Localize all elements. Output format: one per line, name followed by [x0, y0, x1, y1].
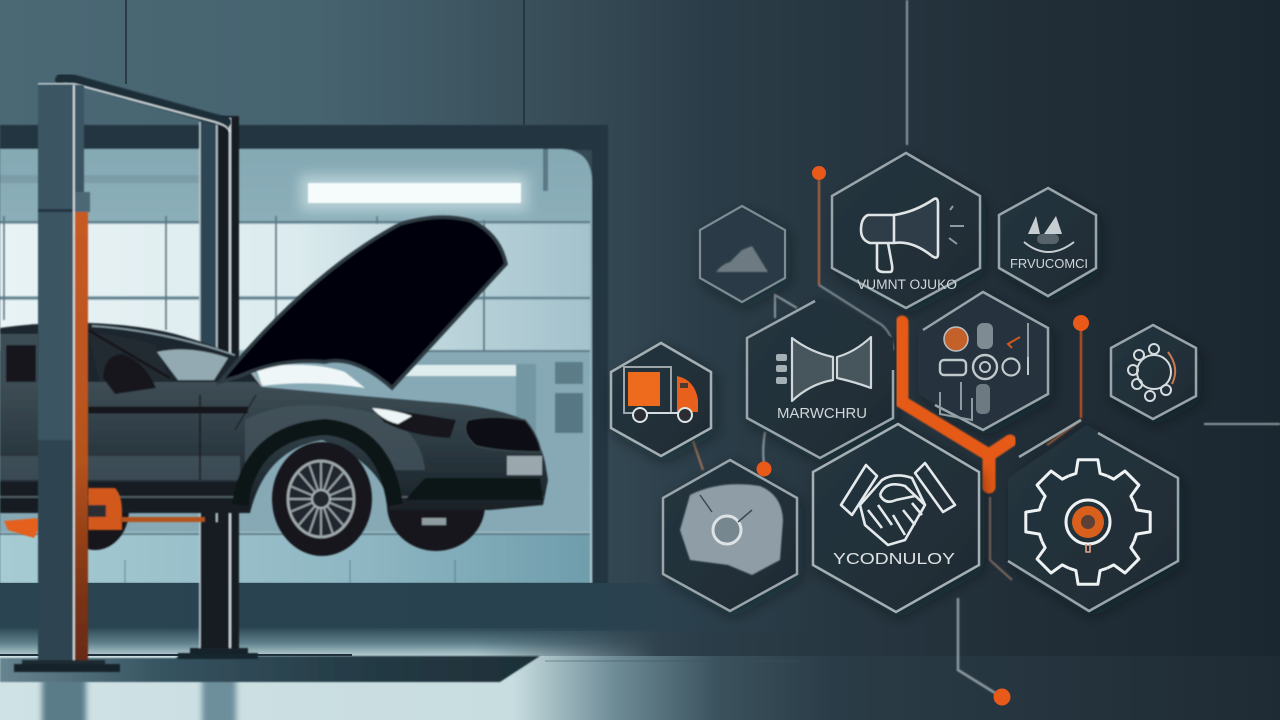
car	[0, 217, 548, 556]
rear wheel	[61, 470, 129, 550]
grille	[465, 417, 541, 452]
ceiling cables	[126, 0, 524, 125]
engine bay light	[256, 365, 365, 388]
open hood	[220, 217, 506, 388]
icon: bow-tie	[792, 337, 871, 401]
hexagon: handshake	[813, 424, 979, 612]
hexagon: gear	[1008, 420, 1178, 611]
hexagon: tools	[918, 292, 1048, 430]
icon: face	[1024, 216, 1074, 252]
icon: brake disc	[680, 484, 783, 575]
door crease and lines	[88, 406, 248, 414]
fender arch	[240, 427, 395, 505]
ceiling light bar	[300, 175, 528, 211]
label: VUMNT OJUKO	[857, 277, 957, 292]
floor	[0, 583, 813, 720]
glass panes	[0, 224, 590, 583]
hexagon: truck	[611, 343, 711, 456]
hexagon: small gear	[1111, 325, 1196, 419]
hook	[543, 149, 548, 191]
icon: gear	[1026, 460, 1150, 584]
sill	[0, 482, 250, 513]
icon: mountain	[716, 246, 768, 272]
icon: handshake	[841, 463, 955, 545]
hexagon: megaphone	[832, 153, 980, 308]
back wall equipment	[516, 362, 583, 454]
front wheel	[272, 442, 372, 556]
rear light bar	[396, 365, 516, 376]
lift: front post	[14, 85, 120, 672]
hexagon: face	[999, 188, 1096, 296]
hexagon: marketing	[747, 298, 893, 458]
icon: scalloped ring	[1128, 344, 1175, 401]
icon: truck	[624, 367, 698, 422]
icon: tools cluster	[940, 323, 1028, 420]
body panel highlight	[0, 456, 240, 480]
orange dots	[756, 166, 1089, 706]
hexagon: disc	[663, 460, 797, 611]
car body	[0, 382, 548, 513]
thin connector lines	[693, 0, 1280, 696]
window frame	[0, 125, 608, 590]
label: FRVUCOMCI	[1010, 256, 1088, 271]
fender highlight	[245, 405, 425, 470]
label: YCODNULOY	[833, 551, 955, 568]
orange lift arm	[4, 488, 205, 538]
number plate	[507, 456, 542, 475]
headlight	[372, 408, 456, 438]
label: MARWCHRU	[777, 405, 867, 422]
far front wheel	[387, 459, 485, 551]
orange connector	[902, 322, 1010, 487]
lower bumper	[405, 478, 543, 500]
icon: megaphone	[861, 199, 964, 272]
lift: rear post	[178, 116, 258, 659]
upper band	[0, 175, 205, 183]
workshop window	[0, 125, 608, 590]
side mirror	[103, 354, 156, 394]
window grid	[0, 216, 590, 583]
hexagon: mountain	[700, 206, 785, 302]
window backdrop	[0, 149, 592, 583]
car roof and glass	[0, 323, 262, 395]
hood strut	[250, 370, 262, 386]
lift: top beam	[38, 77, 230, 132]
